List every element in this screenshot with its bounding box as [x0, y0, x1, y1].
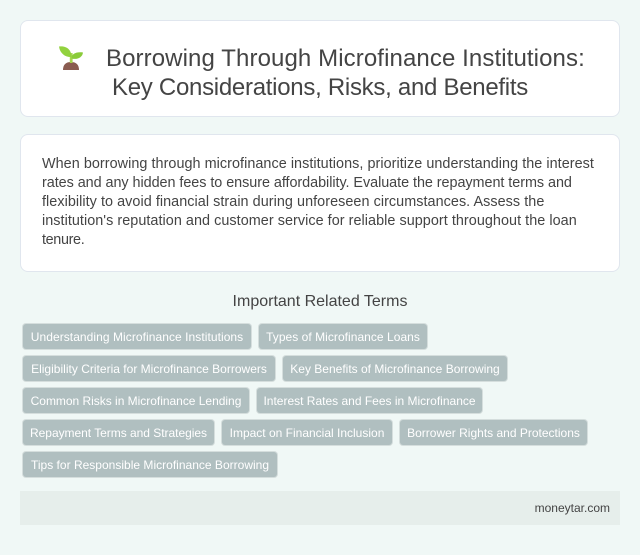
related terms heading: Important Related Terms: [233, 293, 407, 310]
related term tags: Eligibility Criteria for Microfinance Borrowers: [31, 362, 267, 376]
title second line: Key Considerations, Risks, and Benefits: [112, 74, 528, 101]
summary text: [42, 156, 594, 248]
related term tags: Understanding Microfinance Institutions: [31, 330, 243, 344]
summary text: flexibility to avoid financial strain during unforeseen circumstances. Assess the: [42, 194, 544, 210]
icon: seedling: [59, 46, 83, 70]
related term tags: Repayment Terms and Strategies: [30, 426, 207, 440]
related term tags: Impact on Financial Inclusion: [230, 426, 384, 440]
related term tags: Common Risks in Microfinance Lending: [31, 394, 241, 408]
related term tags: Interest Rates and Fees in Microfinance: [263, 394, 476, 408]
footer source text: moneytar.com: [535, 501, 610, 515]
summary text: rates and any hidden fees to ensure affordability. Evaluate the repayment terms and: [42, 175, 572, 191]
header panel: [20, 20, 620, 117]
related term tags: Types of Microfinance Loans: [266, 330, 420, 344]
title: Borrowing Through Microfinance Institutions:: [106, 45, 585, 72]
related term tags: [22, 323, 588, 478]
summary text: tenure.: [42, 232, 84, 248]
summary text: institution's reputation and customer service for reliable support throughout the loan: [42, 213, 577, 229]
summary panel: [20, 134, 620, 272]
footer bar: [20, 491, 620, 525]
related term tags: Tips for Responsible Microfinance Borrowing: [31, 458, 269, 472]
related term tags: Borrower Rights and Protections: [407, 426, 580, 440]
related term tags: Key Benefits of Microfinance Borrowing: [290, 362, 500, 376]
summary text: When borrowing through microfinance institutions, prioritize understanding the interest: [42, 156, 594, 172]
